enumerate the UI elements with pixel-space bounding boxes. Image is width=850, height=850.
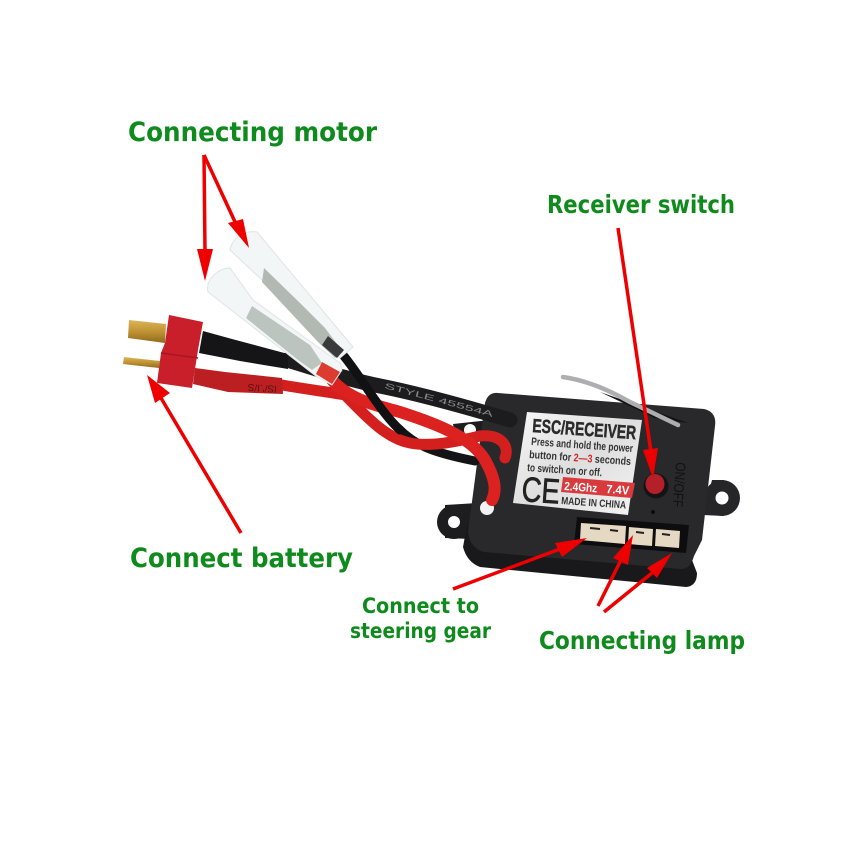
sticker label: to switch on or off.	[527, 462, 602, 479]
arrow: lamp right	[604, 553, 672, 612]
motor bullet connector: lower	[208, 268, 342, 385]
motor bullet connector: upper	[230, 232, 353, 358]
label: connecting motor: Connecting motor	[128, 117, 378, 148]
sticker label: CE	[520, 470, 561, 512]
label: receiver switch: Receiver switch	[547, 190, 735, 219]
red wire heat shrink: IS/'.I/S	[247, 381, 277, 394]
arrows	[147, 155, 672, 612]
arrow: motor right	[204, 155, 249, 248]
wires	[282, 355, 510, 500]
module body	[468, 393, 715, 569]
sticker label: 7.4V	[606, 482, 630, 498]
mounting ears	[437, 420, 740, 539]
label: connect to steering gear: Connect to	[362, 594, 479, 618]
arrow: motor left	[197, 155, 213, 281]
ON/OFF text: ON/OFF	[670, 462, 689, 508]
T-plug pins	[123, 320, 166, 368]
sticker label: 2.4Ghz	[564, 479, 598, 495]
arrow: lamp middle	[598, 535, 633, 606]
arrow: receiver switch	[618, 228, 658, 478]
label: connect battery: Connect battery	[130, 543, 353, 574]
label: connect to steering gear	[350, 594, 492, 643]
T-plug red housing	[157, 315, 203, 388]
sticker label: ESC/RECEIVER	[532, 416, 637, 444]
arrow: battery	[147, 375, 241, 533]
red wire heat shrink	[193, 368, 283, 394]
label: connecting lamp: Connecting lamp	[539, 626, 745, 655]
antenna slot	[600, 392, 688, 423]
wire print: STYLE 45554A	[383, 381, 495, 419]
sticker label	[513, 412, 642, 515]
sticker label: MADE IN CHINA	[561, 495, 627, 512]
lower case	[463, 525, 700, 587]
sticker label: button for 2—3 seconds	[529, 449, 631, 468]
power button	[644, 474, 668, 498]
antenna	[563, 377, 678, 425]
connector sockets	[574, 517, 689, 553]
ESC module	[437, 377, 740, 587]
label: connect to steering gear: steering gear	[350, 619, 492, 643]
arrow: steering gear	[453, 538, 587, 589]
sticker label: Press and hold the power	[531, 436, 634, 455]
black wire heat shrink	[199, 331, 288, 369]
